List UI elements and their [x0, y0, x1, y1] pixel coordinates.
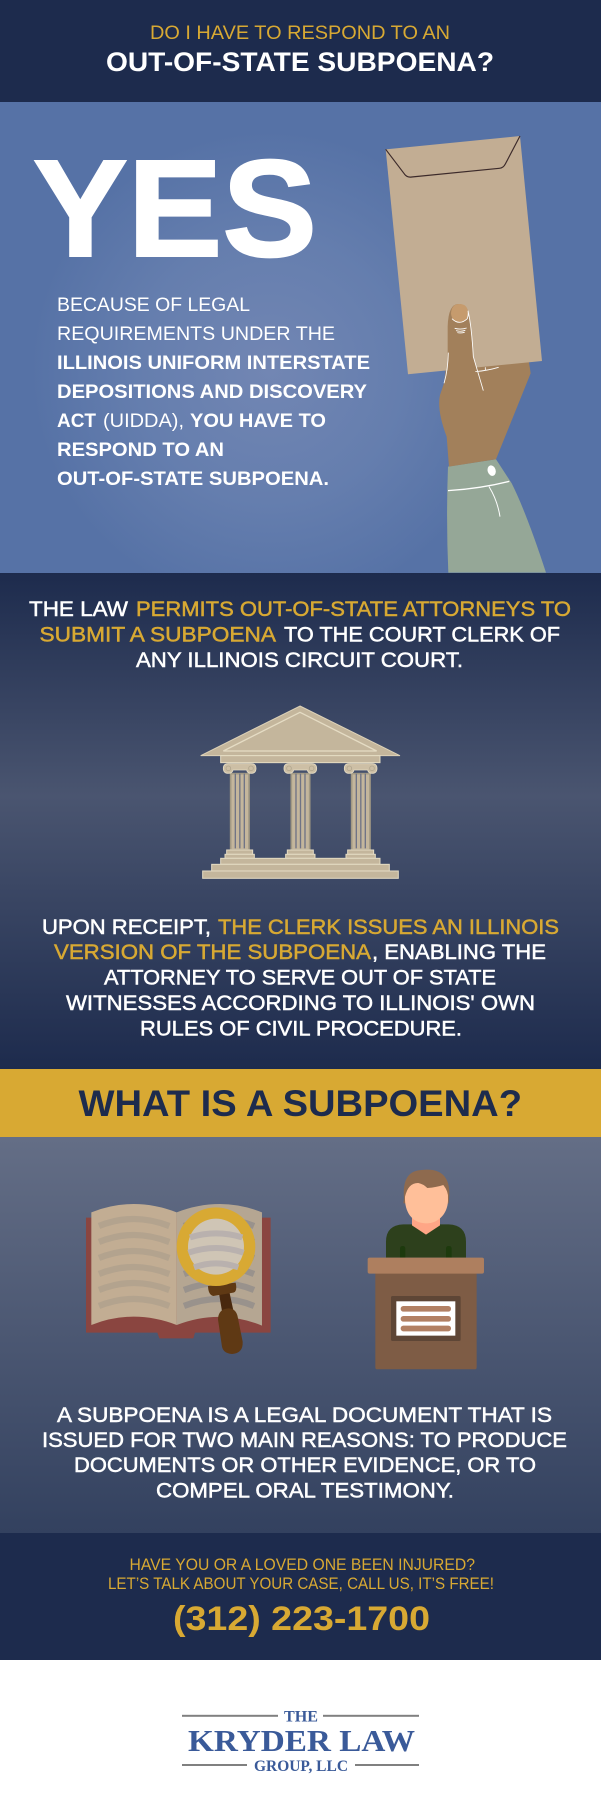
- big yes heading: YES: [33, 132, 317, 286]
- logo: firm name: [188, 1708, 415, 1775]
- answer text block: OUT-OF-STATE SUBPOENA.: [57, 468, 329, 490]
- law text block: [29, 597, 571, 672]
- icon: hand holding envelope: [386, 136, 546, 573]
- panel: call to action: [0, 1533, 601, 1660]
- clerk text block: UPON RECEIPT,: [42, 915, 211, 939]
- header question line: DO I HAVE TO RESPOND TO AN: [150, 22, 450, 44]
- title: OUT-OF-STATE SUBPOENA?: [106, 47, 494, 77]
- definition text block: ISSUED FOR TWO MAIN REASONS: TO PRODUCE: [42, 1428, 567, 1452]
- clerk text block: VERSION OF THE SUBPOENA: [54, 940, 372, 964]
- panel: header: [0, 0, 601, 102]
- clerk text block: THE CLERK ISSUES AN ILLINOIS: [218, 915, 559, 939]
- law text block: SUBMIT A SUBPOENA: [40, 622, 277, 646]
- definition text block: [42, 1403, 567, 1502]
- phone number: (312) 223-1700: [173, 1600, 430, 1638]
- banner heading: WHAT IS A SUBPOENA?: [78, 1082, 522, 1124]
- answer text block: DEPOSITIONS AND DISCOVERY: [57, 381, 367, 403]
- definition text block: DOCUMENTS OR OTHER EVIDENCE, OR TO: [74, 1453, 536, 1477]
- icon: courthouse: [201, 706, 400, 878]
- clerk text block: , ENABLING THE: [372, 940, 546, 964]
- law text block: PERMITS OUT-OF-STATE ATTORNEYS TO: [136, 597, 571, 621]
- call to action text: LET’S TALK ABOUT YOUR CASE, CALL US, IT’S FREE!: [108, 1575, 494, 1593]
- answer text block: REQUIREMENTS UNDER THE: [57, 323, 335, 345]
- answer text block: YOU HAVE TO: [190, 410, 326, 432]
- clerk text block: WITNESSES ACCORDING TO ILLINOIS' OWN: [66, 991, 535, 1015]
- answer text block: RESPOND TO AN: [57, 439, 224, 461]
- logo: rules: [182, 1715, 419, 1766]
- panel: logo: [0, 1660, 601, 1816]
- call to action text: [108, 1556, 494, 1593]
- panel: what is a subpoena banner: [0, 1069, 601, 1137]
- answer text block: ACT: [57, 410, 96, 432]
- clerk text block: ATTORNEY TO SERVE OUT OF STATE: [104, 966, 496, 990]
- panel: subpoena definition: [0, 1137, 601, 1533]
- panel: the law: [0, 573, 601, 1069]
- law text block: TO THE COURT CLERK OF: [284, 622, 560, 646]
- panel: yes answer: [0, 102, 601, 573]
- answer text block: BECAUSE OF LEGAL: [57, 294, 250, 316]
- definition text block: A SUBPOENA IS A LEGAL DOCUMENT THAT IS: [57, 1403, 552, 1427]
- call to action text: HAVE YOU OR A LOVED ONE BEEN INJURED?: [130, 1556, 475, 1574]
- icon: person at podium: [368, 1170, 484, 1369]
- logo: firm name: KRYDER LAW: [188, 1723, 415, 1758]
- answer text block: [57, 294, 370, 490]
- clerk text block: [42, 915, 559, 1040]
- answer text block: ILLINOIS UNIFORM INTERSTATE: [57, 352, 370, 374]
- definition text block: COMPEL ORAL TESTIMONY.: [156, 1478, 454, 1502]
- logo: firm name: THE: [284, 1708, 318, 1726]
- answer text block: (UIDDA),: [103, 410, 184, 432]
- clerk text block: RULES OF CIVIL PROCEDURE.: [140, 1016, 462, 1040]
- law text block: THE LAW: [29, 597, 129, 621]
- law text block: ANY ILLINOIS CIRCUIT COURT.: [136, 648, 463, 672]
- logo: firm name: GROUP, LLC: [254, 1758, 348, 1775]
- icon: book with magnifying glass: [86, 1204, 271, 1354]
